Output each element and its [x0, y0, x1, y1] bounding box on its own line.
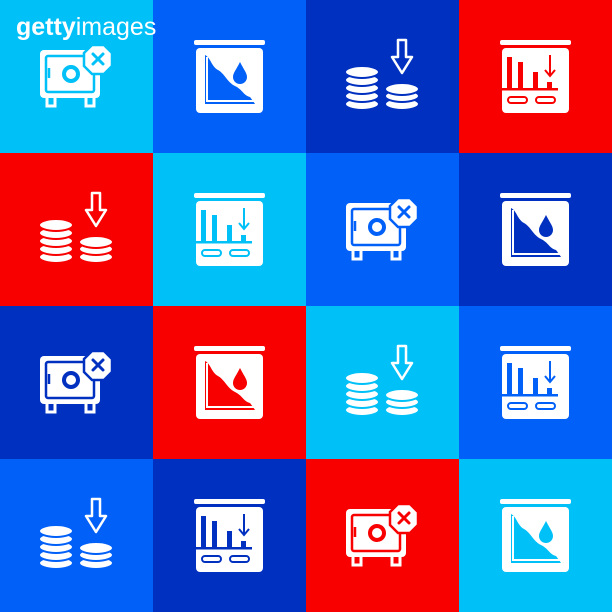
- icon: water chart r1c2: [194, 40, 265, 113]
- icon: bar chart r2c2: [194, 193, 265, 266]
- icon: coins r2c1: [39, 193, 113, 263]
- icon: water chart r2c4: [500, 193, 571, 266]
- icon: safe r1c1: [40, 45, 112, 106]
- icon: coins r1c3: [345, 40, 419, 110]
- icon: bar chart r4c2: [194, 499, 265, 572]
- icon: bar chart r1c4: [500, 40, 571, 113]
- icon: coins r4c1: [39, 499, 113, 569]
- icon: water chart r4c4: [500, 499, 571, 572]
- icon: safe r4c3: [346, 504, 418, 565]
- icon: safe r2c3: [346, 198, 418, 259]
- icon: water chart r3c2: [194, 346, 265, 419]
- watermark logo: gettyimages: [16, 13, 156, 41]
- icon: safe r3c1: [40, 351, 112, 412]
- icon: bar chart r3c4: [500, 346, 571, 419]
- icon: coins r3c3: [345, 346, 419, 416]
